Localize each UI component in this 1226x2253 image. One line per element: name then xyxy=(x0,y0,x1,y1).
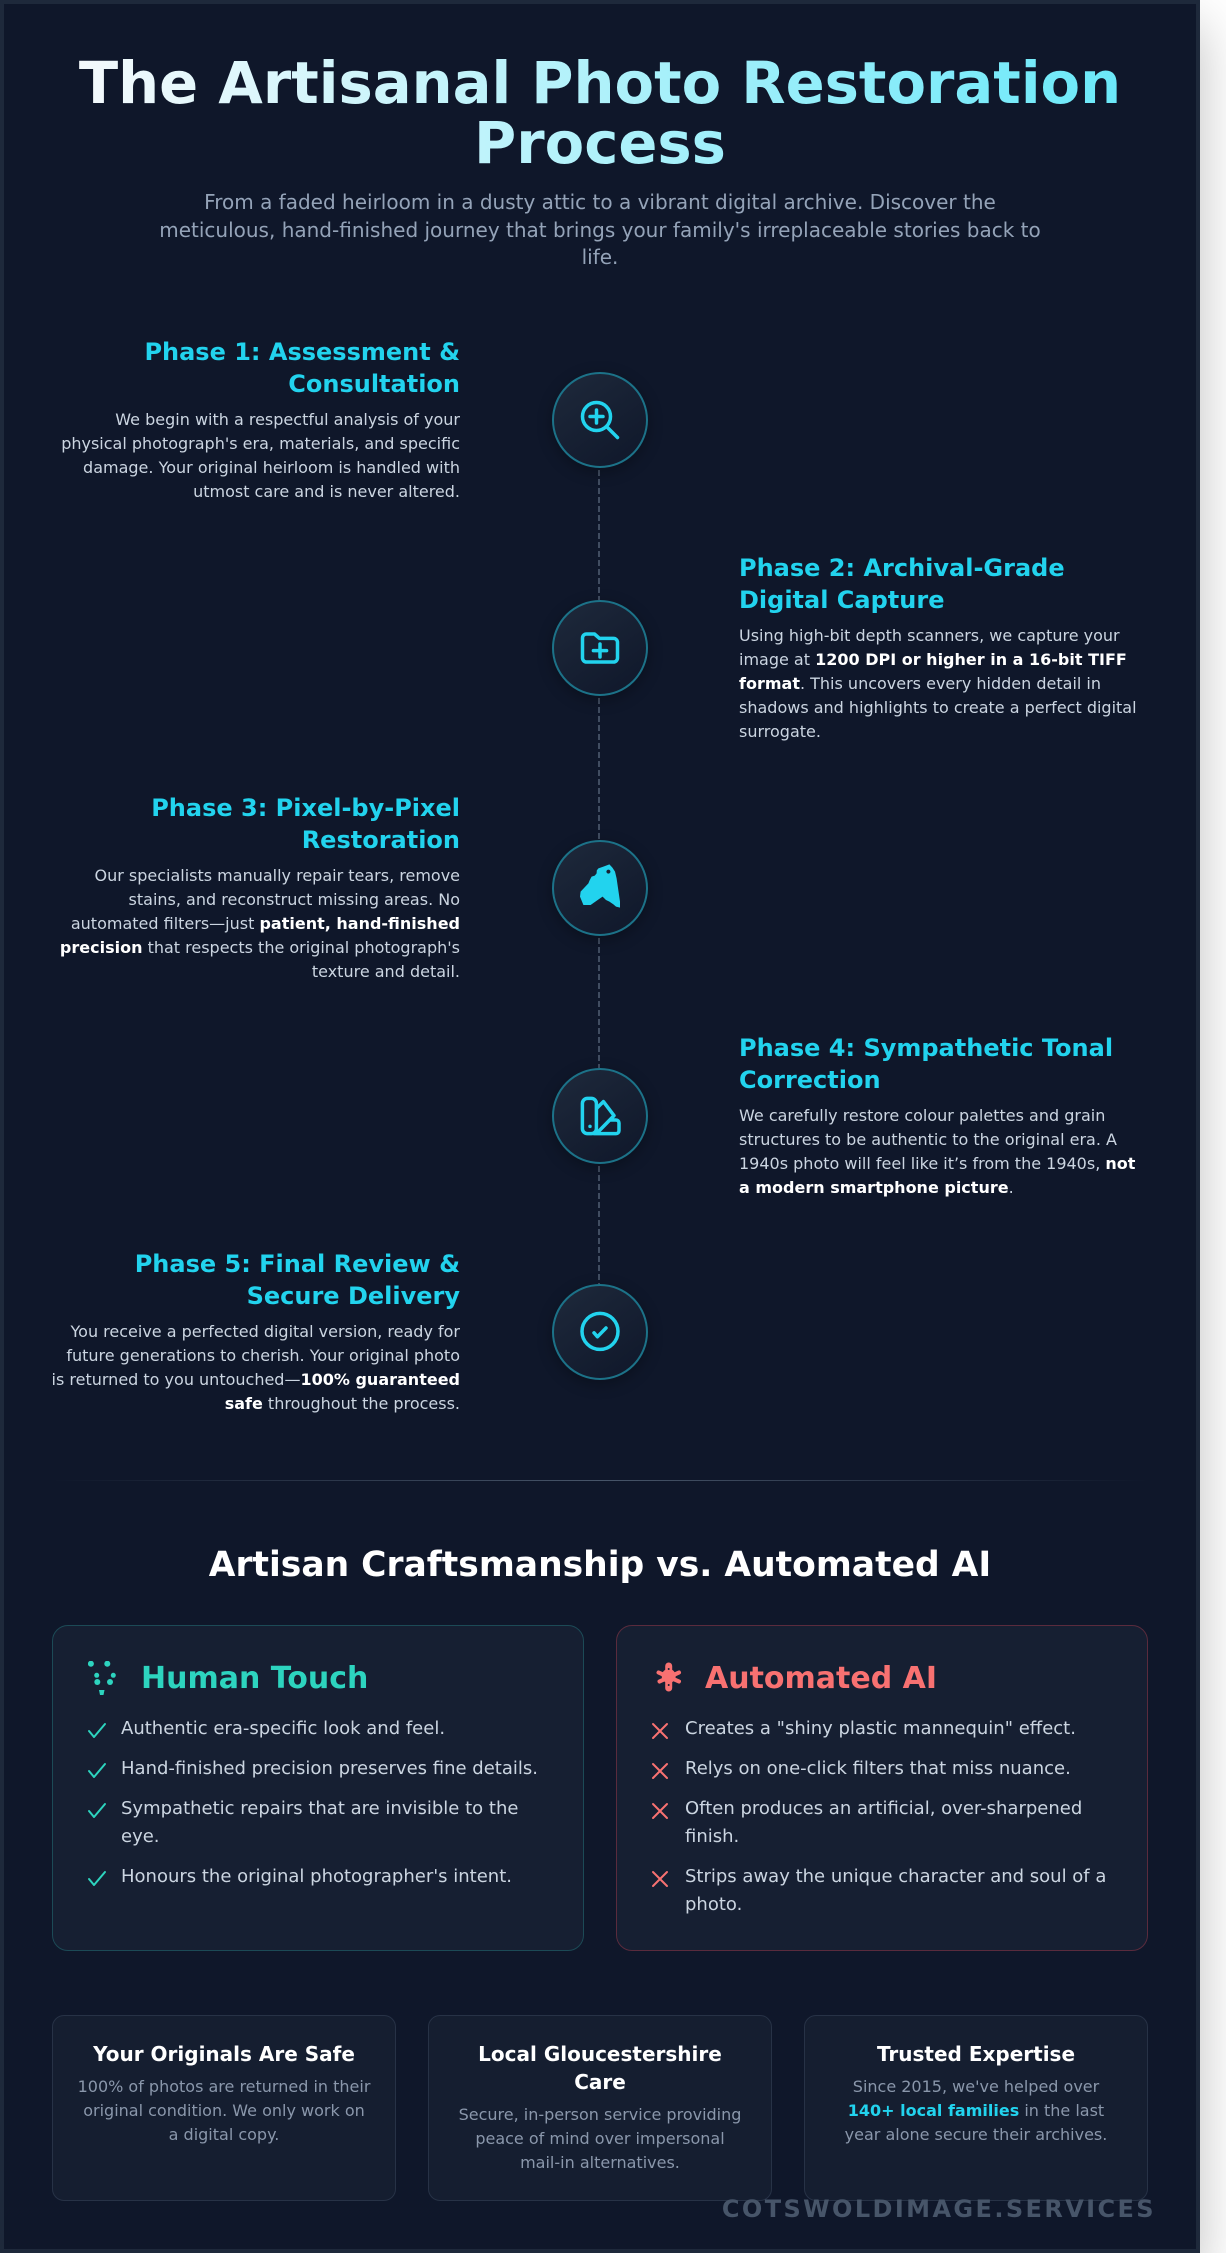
phase 2 body: Using high-bit depth scanners, we capture your xyxy=(739,626,1120,645)
phase 2 text xyxy=(739,554,1137,741)
phase 1 body: utmost care and is never altered. xyxy=(193,482,460,501)
heading: automated ai: Automated AI xyxy=(705,1660,937,1696)
item xyxy=(652,1798,1082,1847)
phase 4 text xyxy=(739,1034,1136,1197)
phase 3 heading: Phase 3: Pixel-by-Pixel xyxy=(151,794,460,822)
subtitle: meticulous, hand-finished journey that brings your family's irreplaceable stories back to xyxy=(159,218,1041,242)
phase 3 body: Our specialists manually repair tears, remove xyxy=(94,866,460,885)
icon: restoration tag xyxy=(552,840,648,936)
timeline connector 4 xyxy=(598,1166,600,1284)
icon: bug xyxy=(656,1662,682,1692)
panel: local care xyxy=(428,2015,772,2201)
phase 5 heading xyxy=(135,1250,460,1310)
icon: magnifier xyxy=(552,372,648,468)
phase 4 heading xyxy=(739,1034,1113,1094)
phase 3 heading: Restoration xyxy=(302,826,460,854)
phase 3 heading xyxy=(151,794,460,854)
phase 5 body xyxy=(52,1322,460,1413)
phase 4 body: We carefully restore colour palettes and grain xyxy=(739,1106,1105,1125)
icon: fingerprint dots xyxy=(88,1661,116,1695)
title xyxy=(52,54,1148,174)
phase 4 body xyxy=(739,1106,1136,1197)
phase 3 body: texture and detail. xyxy=(312,962,460,981)
title: The Artisanal Photo Restoration xyxy=(79,50,1121,116)
subtitle: life. xyxy=(582,245,618,269)
phase 2 body: image at 1200 DPI or higher in a 16-bit TIFF xyxy=(739,650,1127,669)
phase 3 body: precision that respects the original photograph's xyxy=(60,938,460,957)
card text xyxy=(78,2077,370,2144)
phase 2 heading xyxy=(739,554,1065,614)
phase 1 heading: Consultation xyxy=(288,370,460,398)
phase 2 body xyxy=(739,626,1137,741)
panel: human touch xyxy=(52,1625,584,1951)
panel: automated ai: finish. xyxy=(685,1826,739,1847)
item xyxy=(652,1758,1071,1779)
subtitle: From a faded heirloom in a dusty attic to a vibrant digital archive. Discover the xyxy=(204,190,996,214)
phase 3 body: stains, and reconstruct missing areas. No xyxy=(129,890,460,909)
item xyxy=(88,1866,512,1886)
card text: Secure, in-person service providing xyxy=(459,2105,741,2124)
phase 5 body: You receive a perfected digital version, ready for xyxy=(70,1322,460,1341)
phase 1 heading xyxy=(144,338,460,398)
card title: Local Gloucestershire xyxy=(478,2042,722,2066)
card text: Since 2015, we've helped over xyxy=(853,2077,1099,2096)
icon: swatches xyxy=(552,1068,648,1164)
phase 2 heading: Phase 2: Archival-Grade xyxy=(739,554,1065,582)
card text: original condition. We only work on xyxy=(83,2101,365,2120)
panel: automated ai: Relys on one-click filters that miss nuance. xyxy=(685,1758,1071,1778)
phase 4 body: a modern smartphone picture. xyxy=(739,1178,1014,1197)
panel: automated ai: Creates a "shiny plastic mannequin" effect. xyxy=(685,1718,1076,1738)
phase 2 heading: Digital Capture xyxy=(739,586,944,614)
timeline connector 1 xyxy=(598,470,600,600)
phase 1 heading: Phase 1: Assessment & xyxy=(144,338,460,366)
item xyxy=(88,1758,538,1778)
phase 5 body: safe throughout the process. xyxy=(225,1394,460,1413)
panel: human touch: eye. xyxy=(121,1826,160,1847)
phase 1 body: damage. Your original heirloom is handled with xyxy=(83,458,460,477)
phase 4 body: structures to be authentic to the original era. A xyxy=(739,1130,1117,1149)
timeline connector 3 xyxy=(598,938,600,1068)
phase 1 body: physical photograph's era, materials, and specific xyxy=(61,434,460,453)
heading: human touch: Human Touch xyxy=(141,1660,368,1696)
card text: a digital copy. xyxy=(169,2125,279,2144)
panel: automated ai xyxy=(616,1625,1148,1951)
timeline connector 2 xyxy=(598,698,600,840)
item xyxy=(88,1798,518,1847)
phase 5 heading: Phase 5: Final Review & xyxy=(135,1250,460,1278)
card text: 100% of photos are returned in their xyxy=(78,2077,370,2096)
item xyxy=(652,1866,1106,1915)
card title: Care xyxy=(574,2070,626,2094)
panel: automated ai: Strips away the unique character and soul of a xyxy=(685,1866,1106,1886)
item xyxy=(88,1718,445,1738)
comparison heading: Artisan Craftsmanship vs. Automated AI xyxy=(209,1545,991,1585)
panel: automated ai: Often produces an artificial, over-sharpened xyxy=(685,1798,1082,1818)
card title xyxy=(478,2042,722,2094)
panel: human touch: Hand-finished precision preserves fine details. xyxy=(121,1758,538,1778)
phase 1 text xyxy=(61,338,460,501)
phase 3 body: automated filters—just patient, hand-finished xyxy=(71,914,460,933)
watermark: COTSWOLDIMAGE.SERVICES xyxy=(722,2195,1156,2223)
phase 5 body: is returned to you untouched—100% guaranteed xyxy=(52,1370,460,1389)
phase 4 heading: Correction xyxy=(739,1066,881,1094)
card text xyxy=(459,2105,741,2172)
subtitle xyxy=(159,190,1041,269)
phase 3 body xyxy=(60,866,460,981)
phase 4 body: 1940s photo will feel like it’s from the 1940s, not xyxy=(739,1154,1135,1173)
panel: automated ai: photo. xyxy=(685,1894,742,1915)
phase 5 heading: Secure Delivery xyxy=(247,1282,460,1310)
phase 2 body: shadows and highlights to create a perfect digital xyxy=(739,698,1137,717)
card title: Your Originals Are Safe xyxy=(93,2042,355,2066)
phase 5 body: future generations to cherish. Your original photo xyxy=(66,1346,460,1365)
panel: human touch: Honours the original photographer's intent. xyxy=(121,1866,512,1886)
phase 5 text xyxy=(52,1250,460,1413)
phase 2 body: format. This uncovers every hidden detail in xyxy=(739,674,1101,693)
card title: Trusted Expertise xyxy=(877,2042,1075,2066)
phase 2 body: surrogate. xyxy=(739,722,821,741)
card text: 140+ local families in the last xyxy=(848,2101,1104,2120)
card text xyxy=(845,2077,1107,2144)
card text: mail-in alternatives. xyxy=(520,2153,680,2172)
panel: human touch: Sympathetic repairs that are invisible to the xyxy=(121,1798,518,1818)
icon: folder plus xyxy=(552,600,648,696)
title: Process xyxy=(474,110,726,177)
phase 1 body: We begin with a respectful analysis of your xyxy=(115,410,460,429)
card text: year alone secure their archives. xyxy=(845,2125,1107,2144)
panel: originals safe xyxy=(52,2015,396,2201)
phase 1 body xyxy=(61,410,460,501)
divider xyxy=(52,1480,1148,1481)
icon: check circle xyxy=(552,1284,648,1380)
panel: trusted expertise xyxy=(804,2015,1148,2201)
card text: peace of mind over impersonal xyxy=(475,2129,725,2148)
item xyxy=(652,1718,1076,1739)
phase 4 heading: Phase 4: Sympathetic Tonal xyxy=(739,1034,1113,1062)
panel: human touch: Authentic era-specific look and feel. xyxy=(121,1718,445,1738)
phase 3 text xyxy=(60,794,460,981)
